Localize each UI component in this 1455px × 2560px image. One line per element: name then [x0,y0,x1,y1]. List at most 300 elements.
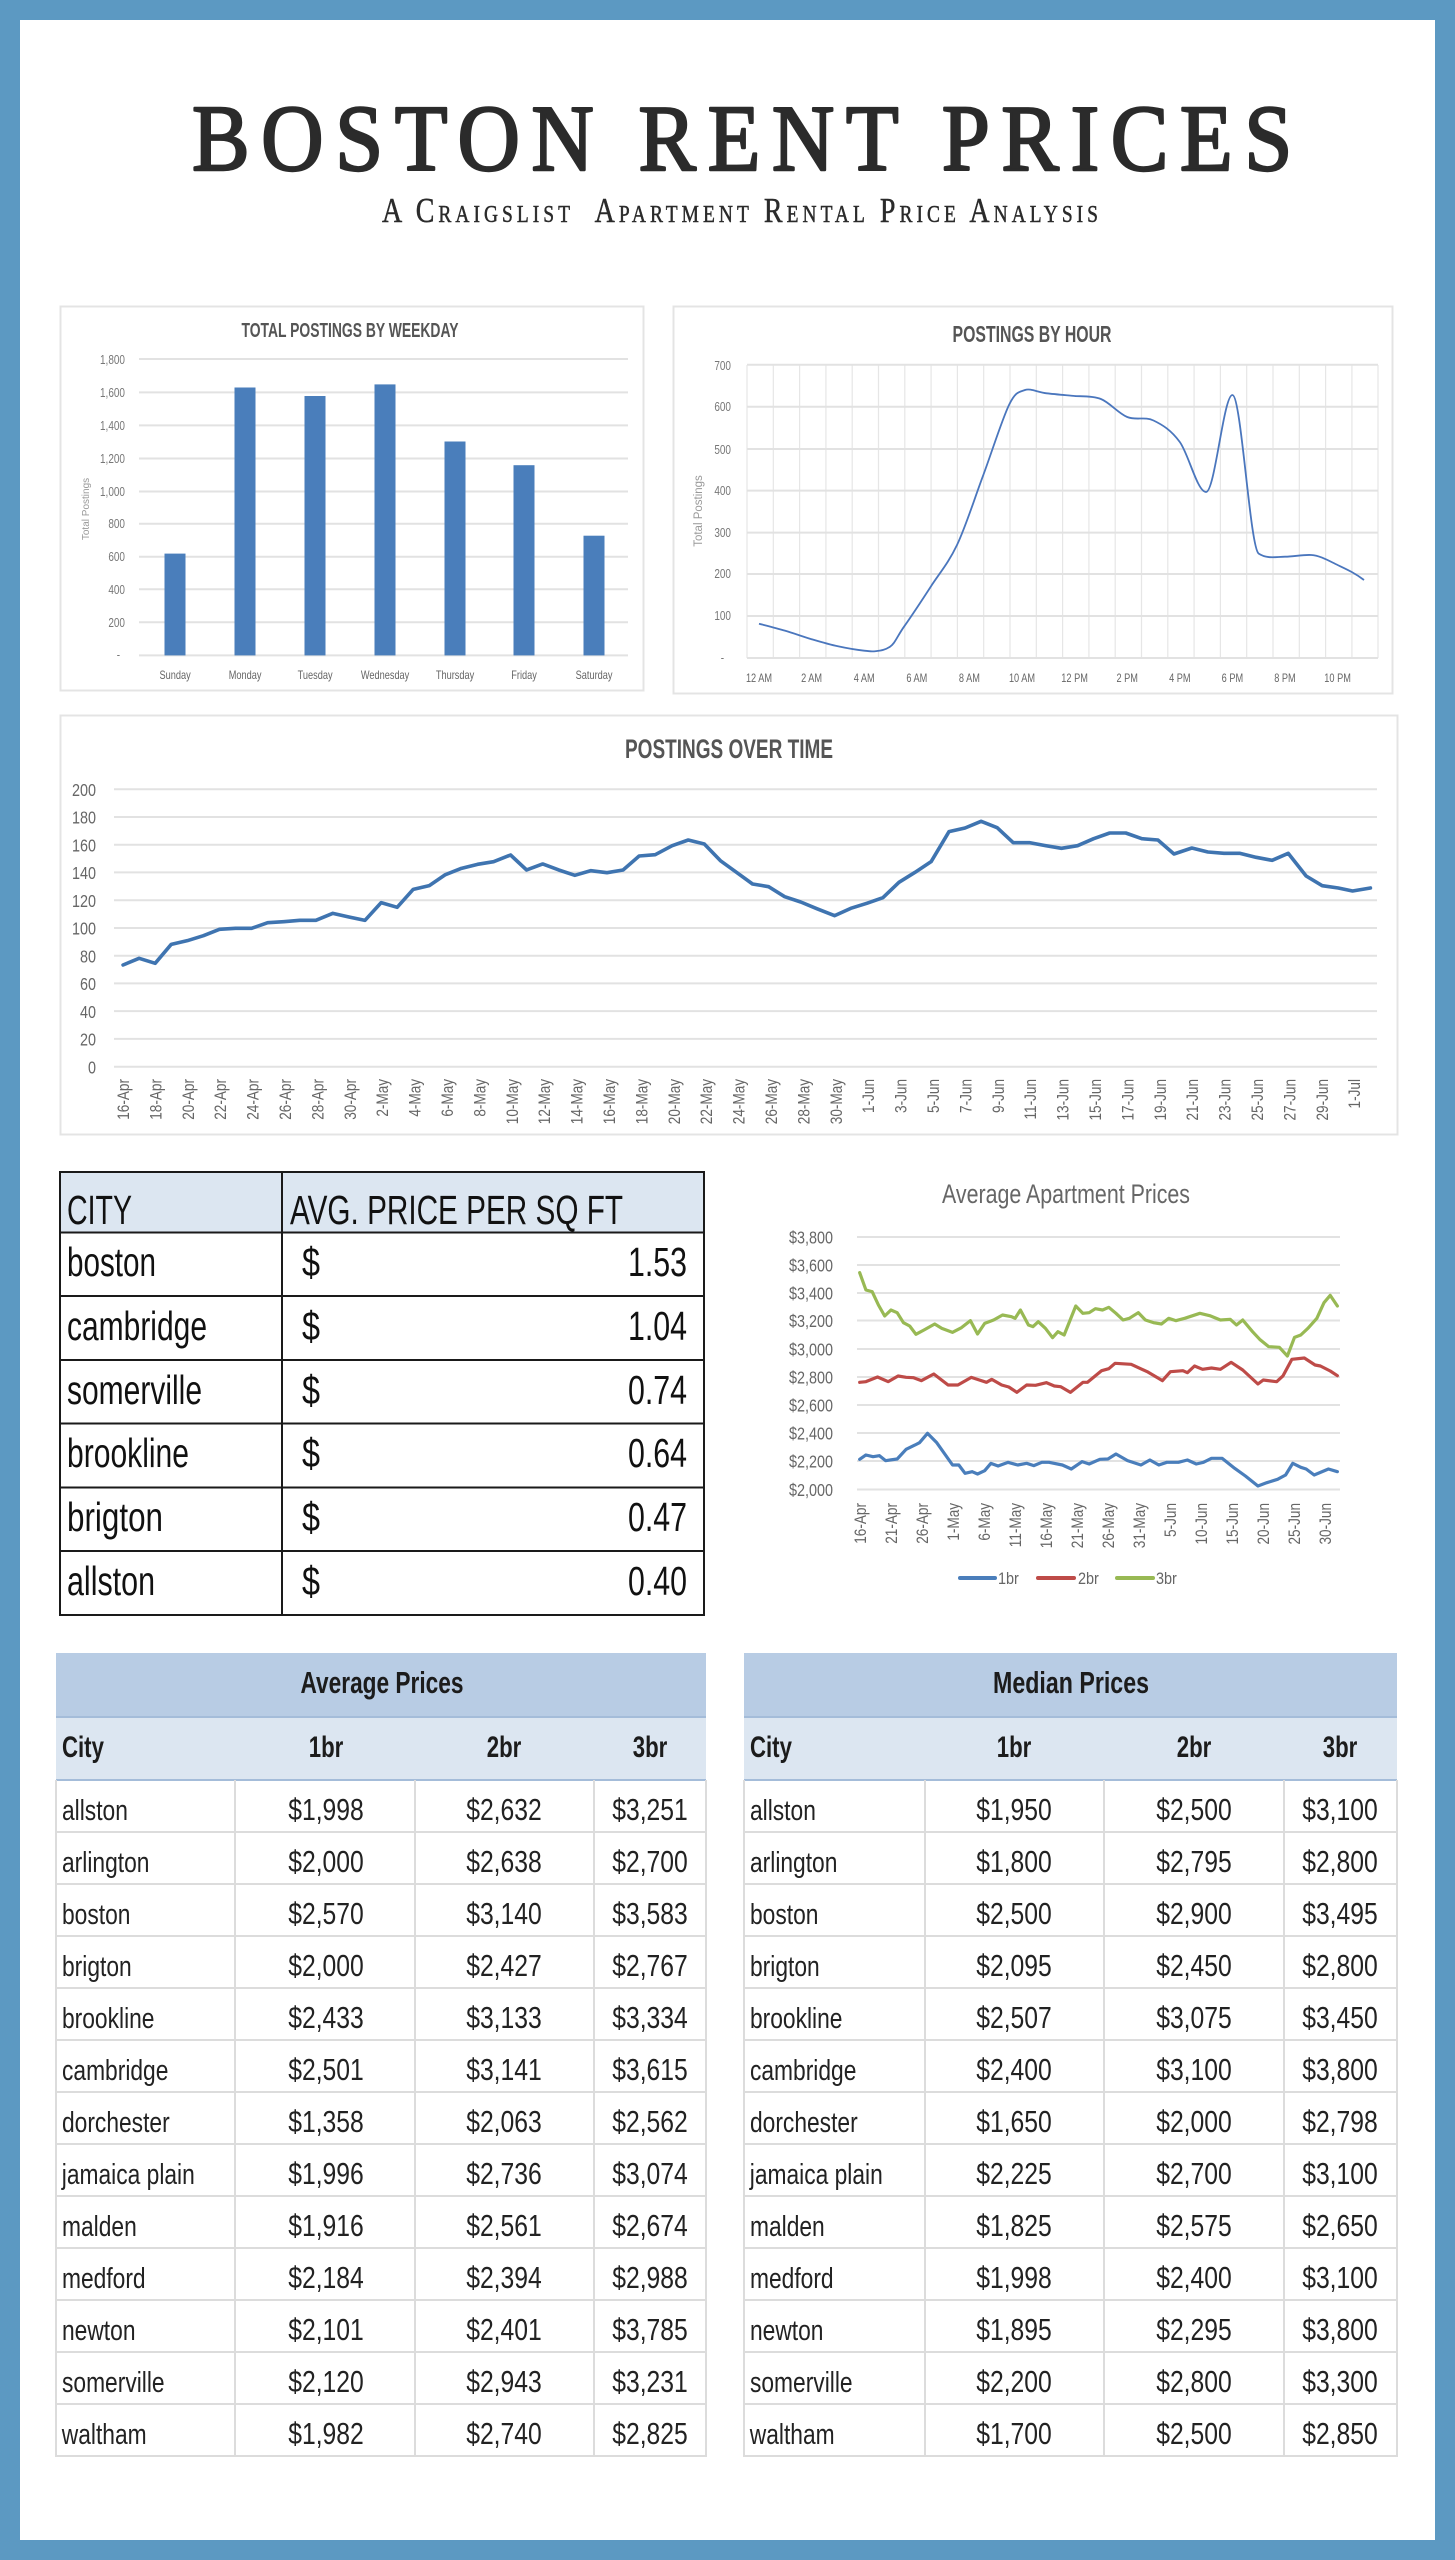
row: waltham: $2,740 [466,2417,542,2451]
row: arlington: $2,795 [1156,1845,1232,1879]
row: medford: $3,100 [1302,2261,1378,2295]
x axis labels: dates: 28-Apr [309,1079,328,1120]
line: postings per hour [759,389,1364,651]
x axis labels: dates: 30-Apr [341,1079,360,1120]
x axis labels: price dates: 25-Jun [1286,1503,1304,1545]
row: allston [67,1557,687,1604]
x axis labels: price dates: 10-Jun [1193,1503,1211,1545]
row: brigton: $2,095 [976,1949,1052,1983]
x axis labels: dates: 12-May [536,1079,555,1124]
row: malden: $2,674 [612,2209,688,2243]
row: medford [750,2261,1378,2295]
row: newton: $2,401 [466,2313,542,2347]
x axis labels: dates: 24-May [730,1079,749,1124]
row: somerville: $3,300 [1302,2365,1378,2399]
x axis labels: weekdays: Sunday [159,670,191,682]
row: cambridge: $3,800 [1302,2053,1378,2087]
row: brigton: $2,427 [466,1949,542,1983]
row: malden: $1,825 [976,2209,1052,2243]
row: brookline: $3,133 [466,2001,542,2035]
y axis labels: hour: 500 [714,444,731,457]
row: jamaica plain: $2,736 [466,2157,542,2191]
legend: 2br [1078,1570,1099,1588]
x axis labels: weekdays: Saturday [576,670,613,682]
row: brigton [67,1493,687,1540]
row: dorchester [750,2105,1378,2139]
panel: postings over time [60,716,1398,1134]
x axis labels: price dates: 30-Jun [1317,1503,1335,1545]
x axis labels: dates: 9-Jun [989,1079,1008,1113]
column headers: 1br [309,1730,343,1764]
row: jamaica plain: $3,100 [1302,2157,1378,2191]
y axis labels: over time: 140 [72,864,96,884]
y axis labels: weekday: 200 [108,617,125,630]
x axis labels: weekdays: Wednesday [361,670,410,682]
x axis labels: dates: 25-Jun [1249,1079,1267,1121]
row: allston: $3,100 [1302,1793,1378,1827]
legend: 1br [998,1570,1019,1588]
row: malden: malden [750,2212,825,2243]
x axis labels: price dates: 15-Jun [1224,1503,1242,1545]
row: somerville [62,2365,688,2399]
y axis labels: weekday: 600 [108,551,125,564]
x axis labels: dates: 16-May [601,1079,619,1124]
x axis labels: price dates: 5-Jun [1162,1503,1180,1537]
x axis labels: price dates: 31-May [1131,1503,1149,1548]
x axis labels: weekdays: Tuesday [298,670,333,682]
x axis labels: dates: 3-Jun [892,1079,911,1113]
x axis labels: price dates: 6-May [976,1503,994,1541]
row: boston: $ [302,1239,320,1285]
row: dorchester: $1,358 [288,2105,364,2139]
column headers: City [62,1730,104,1764]
x axis labels: hours: 10 AM [1009,673,1035,685]
row: cambridge [62,2053,688,2087]
row: allston: allston [750,1796,816,1827]
row: boston: $3,495 [1302,1897,1378,1931]
bars: postings per weekday [164,384,604,655]
row: dorchester: dorchester [62,2108,170,2139]
x axis labels: hours: 2 AM [801,673,822,685]
row: waltham [749,2417,1378,2451]
x axis labels: dates: 1-Jun [860,1079,879,1113]
x axis labels: weekdays: Thursday [436,670,475,682]
y axis labels: over time: 60 [80,975,96,995]
y axis labels: prices: $3,000 [789,1340,833,1360]
y axis labels: prices [789,1228,833,1500]
line: 3br [860,1273,1337,1356]
row: malden [750,2209,1378,2243]
row: malden: $1,916 [288,2209,364,2243]
row: brigton: $2,450 [1156,1949,1232,1983]
x axis labels: price dates: 16-Apr [852,1503,870,1544]
y axis labels: prices: $2,800 [789,1368,833,1388]
column headers: City [750,1730,792,1764]
y axis labels: weekday: 400 [108,584,125,597]
row: allston: $2,632 [466,1793,542,1827]
row: brigton: brigton [62,1952,132,1983]
y axis labels: hour: 200 [714,568,731,581]
column headers: 3br [633,1730,667,1764]
x axis labels: dates: 2-May [374,1079,393,1117]
chart title: weekday: TOTAL POSTINGS BY WEEKDAY [242,320,459,342]
row: somerville: somerville [67,1367,202,1413]
x axis labels: price dates: 16-May [1038,1503,1056,1548]
x axis labels: dates: 7-Jun [957,1079,976,1113]
x axis labels: dates: 5-Jun [925,1079,943,1113]
row: medford: medford [750,2264,834,2295]
row: somerville [750,2365,1378,2399]
row: medford: $2,184 [288,2261,364,2295]
row: malden: malden [62,2212,137,2243]
row: dorchester: $2,000 [1156,2105,1232,2139]
row: arlington: $2,700 [612,1845,688,1879]
x axis labels: dates: 21-Jun [1184,1079,1203,1121]
row: boston: boston [67,1239,156,1285]
x axis labels: hours: 6 PM [1222,673,1243,685]
row: boston: $3,583 [612,1897,688,1931]
row: cambridge: $ [302,1303,320,1349]
chart title: over time: POSTINGS OVER TIME [625,734,833,764]
row: dorchester [62,2105,688,2139]
row: boston: $3,140 [466,1897,542,1931]
row: medford [62,2261,688,2295]
row: waltham: $2,850 [1302,2417,1378,2451]
table: average prices [56,1653,706,2456]
y axis labels: over time: 40 [80,1002,96,1022]
y axis labels: hour: - [721,652,724,665]
x axis labels: dates: 20-May [665,1079,684,1124]
row: boston: boston [62,1900,130,1931]
column headers: 2br [487,1730,521,1764]
x axis labels: dates: 19-Jun [1151,1079,1170,1121]
y axis labels: weekday: 1,800 [100,354,125,367]
x axis labels: dates: 22-May [698,1079,717,1124]
table header: AVG. PRICE PER SQ FT [290,1187,623,1233]
subtitle: A Craigslist Apartment Rental Price Analysis [382,191,1098,230]
y axis labels: prices: $2,600 [789,1396,833,1416]
y axis labels: over time: 100 [72,919,96,939]
row: newton: $3,800 [1302,2313,1378,2347]
table header [67,1187,623,1233]
x axis labels: dates: 11-Jun [1022,1079,1041,1120]
line: daily postings [123,821,1370,965]
x axis labels: dates: 8-May [471,1079,490,1117]
x axis labels: dates [115,1079,1365,1124]
line: 1br [860,1433,1337,1486]
row: brigton: $2,000 [288,1949,364,1983]
row: brigton: brigton [67,1494,163,1540]
row: arlington: $2,638 [466,1845,542,1879]
row: jamaica plain [749,2157,1378,2191]
row: brigton: $ [302,1494,320,1540]
x axis labels: dates: 1-Jul [1346,1079,1365,1108]
row: brigton: 0.47 [628,1493,687,1540]
row: boston [750,1897,1378,1931]
row: allston: $1,998 [288,1793,364,1827]
row: allston [750,1793,1378,1827]
x axis labels: hours: 6 AM [906,673,927,685]
row: newton: $3,785 [612,2313,688,2347]
row: waltham: $2,500 [1156,2417,1232,2451]
row: newton [62,2313,688,2347]
x axis labels: hours: 8 PM [1274,673,1296,685]
row: jamaica plain [61,2157,688,2191]
row: allston [62,1793,688,1827]
row: waltham: waltham [61,2420,147,2451]
y axis labels: weekday [100,354,125,662]
y axis labels: prices: $2,000 [789,1481,833,1500]
column headers [62,1730,667,1764]
legend [960,1570,1177,1588]
x axis labels: weekdays: Monday [229,670,262,682]
row: dorchester: $2,063 [466,2105,542,2139]
row: allston: allston [67,1558,155,1604]
row: brookline [62,2001,688,2035]
row: cambridge [67,1302,687,1349]
row: somerville [67,1366,687,1413]
row: allston: $ [302,1558,320,1604]
row: newton: $2,101 [288,2313,364,2347]
lines: 1br 2br 3br prices [860,1273,1337,1486]
row: somerville: $2,120 [288,2365,364,2399]
y axis labels: hour: 700 [714,360,731,373]
row: dorchester: $2,562 [612,2105,688,2139]
x axis labels: price dates: 20-Jun [1255,1503,1273,1545]
x axis labels: dates: 30-May [827,1079,846,1124]
row: medford: $2,394 [466,2261,542,2295]
y axis labels: over time: 80 [80,947,96,967]
row: brigton [750,1949,1378,1983]
row: newton: $2,295 [1156,2313,1232,2347]
x axis labels: dates: 10-May [503,1079,522,1124]
row: waltham [61,2417,688,2451]
x axis labels: weekdays: Friday [511,670,538,682]
x axis labels: hours: 10 PM [1324,673,1351,685]
row: brookline: $ [302,1430,320,1476]
row: arlington: $2,000 [288,1845,364,1879]
x axis labels: hours: 12 PM [1061,673,1088,685]
y axis labels: over time: 20 [80,1030,96,1050]
x axis labels: price dates: 26-May [1100,1503,1118,1548]
row: boston: $2,900 [1156,1897,1232,1931]
x axis labels: dates: 27-Jun [1281,1079,1300,1121]
y axis labels: prices: $2,400 [789,1424,833,1444]
x axis labels: dates: 26-May [763,1079,781,1124]
row: medford: $2,988 [612,2261,688,2295]
x axis labels: dates: 15-Jun [1087,1079,1105,1121]
row: boston [67,1238,687,1285]
row: medford: medford [62,2264,146,2295]
y axis labels: prices: $3,600 [789,1256,833,1276]
y axis labels: prices: $3,200 [789,1312,833,1331]
row: dorchester: $1,650 [976,2105,1052,2139]
x axis labels: price dates: 26-Apr [914,1503,932,1544]
row: dorchester: dorchester [750,2108,858,2139]
x axis labels: hours: 8 AM [959,673,980,685]
x axis labels: dates: 4-May [406,1079,425,1117]
row: boston: boston [750,1900,818,1931]
row: cambridge: $2,400 [976,2053,1052,2087]
chart title: hour: POSTINGS BY HOUR [952,321,1112,347]
row: allston: $2,500 [1156,1793,1232,1827]
y axis title: hour: Total Postings [693,475,705,547]
y axis labels: weekday: 1,600 [100,387,125,400]
row: somerville: $2,200 [976,2365,1052,2399]
x axis labels: dates: 22-Apr [212,1079,231,1120]
row: cambridge: cambridge [67,1303,207,1349]
row: somerville: $ [302,1367,320,1413]
row: waltham: $1,982 [288,2417,364,2451]
row: brookline: brookline [67,1430,189,1476]
row: arlington [750,1845,1378,1879]
panel: postings by hour [674,306,1392,694]
line: 2br [860,1358,1337,1392]
row: waltham: waltham [749,2420,835,2451]
row: jamaica plain: $2,700 [1156,2157,1232,2191]
x axis labels: dates: 29-Jun [1313,1079,1332,1121]
x axis labels: dates: 16-Apr [115,1079,133,1120]
row: boston: 1.53 [628,1238,687,1285]
row: brookline [750,2001,1378,2035]
y axis labels: hour: 100 [714,610,731,623]
row: jamaica plain: $1,996 [288,2157,364,2191]
y axis title: weekday: Total Postings [81,478,92,540]
x axis labels: weekdays [159,670,613,682]
x axis labels: dates: 20-Apr [179,1079,198,1120]
y axis labels: over time: 200 [72,781,96,800]
column headers: 2br [1177,1730,1211,1764]
y axis labels: over time: 180 [72,808,96,828]
table: median prices [744,1653,1397,2456]
row: arlington: $1,800 [976,1845,1052,1879]
y axis labels: weekday: 1,000 [100,486,125,499]
row: cambridge: cambridge [62,2056,168,2087]
row: malden: $2,650 [1302,2209,1378,2243]
row: dorchester: $2,798 [1302,2105,1378,2139]
y axis labels: hour: 600 [714,401,731,414]
row: brookline: $2,433 [288,2001,364,2035]
table header: CITY [67,1187,132,1233]
x axis labels: price dates: 1-May [945,1503,963,1541]
x axis labels: dates: 17-Jun [1119,1079,1138,1121]
row: allston: $3,251 [612,1793,688,1827]
x axis labels: dates: 24-Apr [244,1079,263,1120]
row: brigton: brigton [750,1952,820,1983]
row: malden: $2,575 [1156,2209,1232,2243]
x axis labels: dates: 13-Jun [1054,1079,1073,1121]
row: cambridge [750,2053,1378,2087]
row: newton: newton [62,2316,135,2347]
x axis labels: hours: 12 AM [746,673,772,685]
x axis labels: dates: 26-Apr [277,1079,295,1120]
y axis labels: prices: $2,200 [789,1452,833,1472]
row: boston: $2,500 [976,1897,1052,1931]
table: average price per square foot [60,1172,704,1615]
row: allston: $1,950 [976,1793,1052,1827]
row: allston: allston [62,1796,128,1827]
heading: median prices: Median Prices [993,1665,1149,1700]
chart: average apartment prices [789,1179,1340,1588]
column headers: 3br [1323,1730,1357,1764]
y axis labels: weekday: 1,400 [100,420,125,433]
x axis labels: hours: 4 PM [1169,673,1191,685]
y axis labels: prices: $3,400 [789,1284,833,1304]
x axis labels: dates: 18-May [633,1079,652,1124]
row: brookline: brookline [750,2004,842,2035]
row: somerville: $2,943 [466,2365,542,2399]
row: cambridge: 1.04 [628,1302,687,1349]
row: brookline: $3,075 [1156,2001,1232,2035]
heading: average prices: Average Prices [300,1665,464,1700]
y axis labels: over time: 120 [72,891,96,911]
y axis labels: over time [72,781,96,1078]
x axis labels: dates: 6-May [439,1079,457,1117]
row: brookline: $2,507 [976,2001,1052,2035]
row: newton [750,2313,1378,2347]
x axis labels: hours: 4 AM [854,673,875,685]
x axis labels: price dates: 21-May [1069,1503,1087,1548]
y axis labels: hour [714,360,731,665]
row: allston: 0.40 [628,1557,687,1604]
y axis labels: prices: $3,800 [789,1228,833,1248]
row: cambridge: $3,615 [612,2053,688,2087]
y axis labels: weekday: 1,200 [100,453,125,466]
x axis labels: dates: 14-May [568,1079,587,1124]
row: cambridge: $3,100 [1156,2053,1232,2087]
row: brookline: brookline [62,2004,154,2035]
y axis labels: weekday: 800 [108,518,125,531]
row: waltham: $2,825 [612,2417,688,2451]
y axis labels: over time: 160 [72,836,96,856]
row: arlington: arlington [750,1848,837,1879]
x axis labels: dates: 18-Apr [147,1079,166,1120]
row: malden: $2,561 [466,2209,542,2243]
row: newton: newton [750,2316,823,2347]
row: somerville: 0.74 [628,1366,687,1413]
row: brookline [67,1429,687,1476]
x axis labels: hours [746,673,1351,685]
y axis labels: weekday: - [117,649,120,662]
row: arlington: arlington [62,1848,149,1879]
row: boston [62,1897,688,1931]
row: malden [62,2209,688,2243]
row: somerville: somerville [62,2368,165,2399]
row: boston: $2,570 [288,1897,364,1931]
y axis labels: over time: 0 [88,1058,96,1078]
row: jamaica plain: $2,225 [976,2157,1052,2191]
row: jamaica plain: jamaica plain [749,2160,883,2191]
row: arlington [62,1845,688,1879]
row: waltham: $1,700 [976,2417,1052,2451]
row: brookline: $3,334 [612,2001,688,2035]
chart title: average apartment prices: Average Apartment Prices [942,1179,1190,1209]
row: somerville: $2,800 [1156,2365,1232,2399]
x axis labels: price dates [852,1503,1335,1548]
row: medford: $1,998 [976,2261,1052,2295]
row: cambridge: cambridge [750,2056,856,2087]
x axis labels: price dates: 11-May [1007,1503,1025,1547]
title: BOSTON RENT PRICES [192,87,1292,191]
row: somerville: $3,231 [612,2365,688,2399]
x axis labels: hours: 2 PM [1116,673,1138,685]
row: medford: $2,400 [1156,2261,1232,2295]
row: cambridge: $3,141 [466,2053,542,2087]
x axis labels: price dates: 21-Apr [883,1503,901,1544]
panel: total postings by weekday [60,306,644,690]
y axis labels: hour: 400 [714,485,731,498]
row: jamaica plain: $3,074 [612,2157,688,2191]
